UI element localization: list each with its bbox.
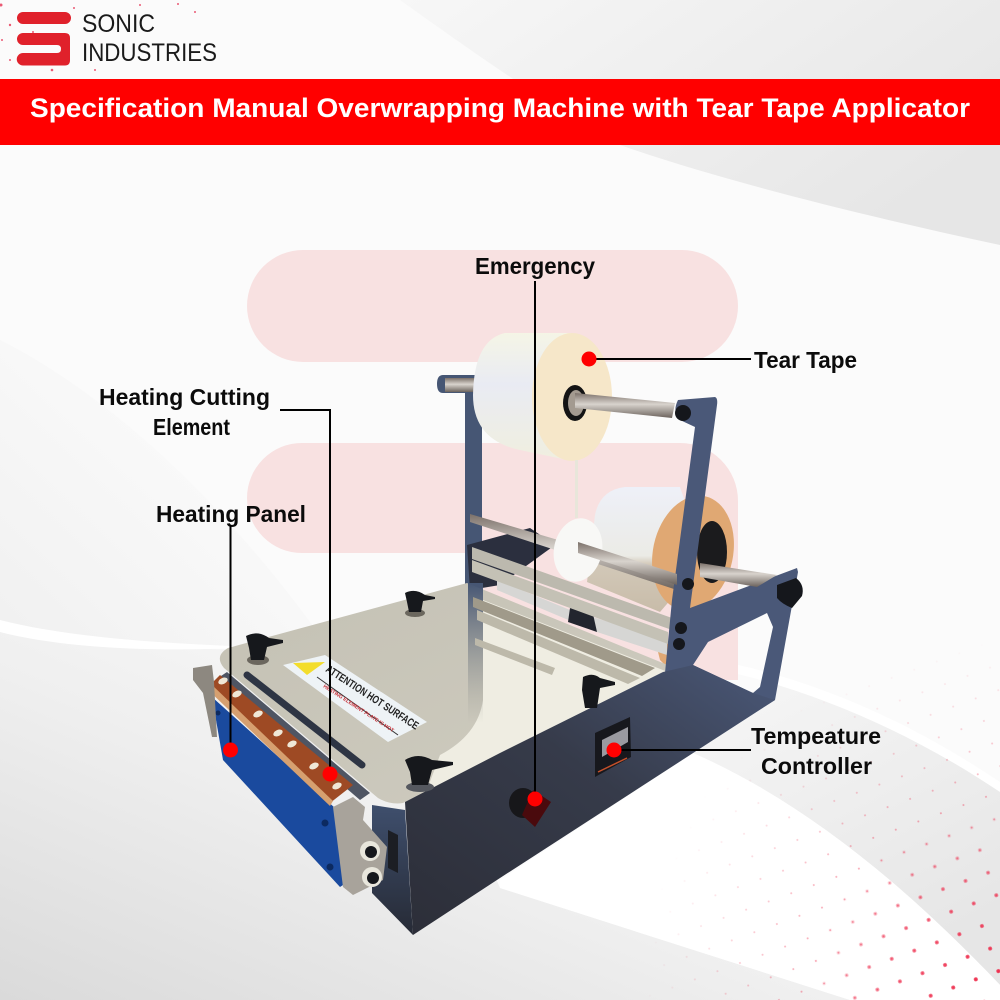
logo wordmark: SONIC <box>82 10 155 38</box>
copper edge <box>207 684 333 806</box>
callout: Emergency <box>475 253 595 806</box>
right upright and arm frame <box>663 397 798 735</box>
left upright frame <box>437 375 482 600</box>
title banner: Specification Manual Overwrapping Machine with Tear Tape Applicator <box>30 93 970 123</box>
warning label: ATTENTION HOT SURFACE <box>323 663 420 732</box>
white guide wheel <box>548 514 608 586</box>
frame bolts <box>673 405 803 650</box>
callout: Temperature Controller: Tempeature <box>751 723 881 749</box>
slot <box>247 675 362 765</box>
warning label: HEATING ELEMENT PLATE IS HOT <box>322 684 395 734</box>
strip holes <box>217 676 343 791</box>
logo wordmark: INDUSTRIES <box>82 39 217 67</box>
callout: Heating Panel <box>156 501 306 758</box>
frame reflection <box>468 583 483 723</box>
dark bracket behind rods <box>467 528 555 590</box>
background speckles near logo <box>0 3 196 71</box>
left bracket <box>193 665 217 737</box>
title banner <box>0 79 1000 145</box>
callout: Heating Panel: Heating Panel <box>156 501 306 527</box>
heating strip <box>210 675 353 803</box>
logo wordmark <box>82 10 217 67</box>
rear rod <box>445 378 485 392</box>
temperature controller display <box>595 717 631 777</box>
callout: Heating Cutting Element <box>99 384 338 782</box>
clamp knobs <box>246 591 615 792</box>
upper rod <box>575 393 675 418</box>
callout: Tear Tape <box>582 347 857 373</box>
lower film roll <box>587 487 744 668</box>
callout: Tear Tape: Tear Tape <box>754 347 857 373</box>
right bracket with connectors <box>333 797 398 895</box>
callout: Emergency: Emergency <box>475 253 595 279</box>
logo <box>17 10 217 67</box>
reflection on plate <box>425 600 668 795</box>
grey panel under channels <box>497 580 667 655</box>
warning label <box>283 655 427 742</box>
callout: Heating Cutting Element: Element <box>153 414 230 440</box>
machine illustration <box>193 333 803 935</box>
rod end over wheel <box>578 542 677 585</box>
channels and rods <box>470 514 677 684</box>
logo mark <box>17 12 71 66</box>
machine body <box>405 665 775 935</box>
dark block <box>568 608 597 632</box>
callout: Temperature Controller: Controller <box>761 753 872 779</box>
blue heating panel <box>212 697 343 887</box>
rear arm rod <box>700 563 777 587</box>
emergency button <box>509 788 551 827</box>
callout: Heating Cutting Element: Heating Cutting <box>99 384 270 410</box>
watermark: pale red logo bars <box>247 250 738 680</box>
top tape roll <box>473 333 612 461</box>
body front corner <box>372 805 413 935</box>
dark rail behind strip <box>218 672 370 800</box>
top plate <box>220 583 675 803</box>
tape strip <box>575 460 578 518</box>
callout: Temperature Controller <box>606 723 881 779</box>
